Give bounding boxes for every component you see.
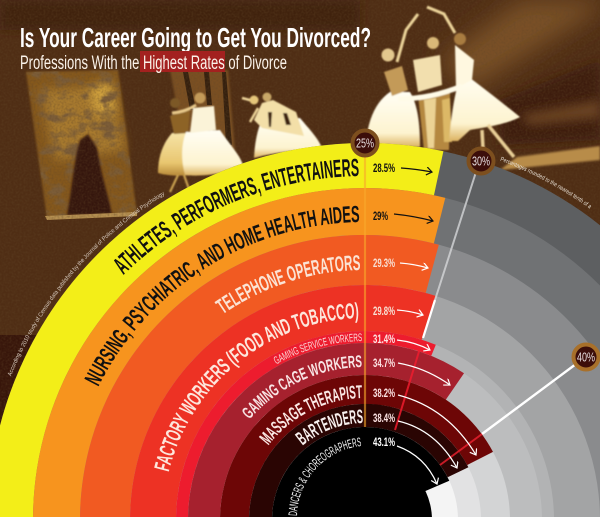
25% reference line [364,150,366,427]
ring: Telephone operators [80,235,600,517]
label: gaming cage: GAMING CAGE WORKERS [242,355,362,418]
subtitle: Professions With the Highest Rates of Divorce [20,53,287,74]
ring: Factory workers [130,285,600,517]
ring: Gaming cage workers [188,343,542,517]
label: bartenders: BARTENDERS [294,410,363,446]
center disc [298,453,432,517]
source footnote: According to 2010 study of Census data published by the Journal of Police and Criminal Psychology [8,192,164,376]
percentage values: 29.8% [373,304,395,318]
percentage values [373,161,395,449]
label: nursing: NURSING, PSYCHIATRIC, AND HOME HEALTH AIDES [84,206,360,386]
label: dancers: DANCERS & CHOREOGRAPHERS [288,438,362,516]
dancers: trio [242,92,322,158]
percentage values: 29.3% [373,256,395,270]
ring: Bartenders [249,404,481,517]
ring: Nursing, psychiatric, and home health aides [33,188,600,517]
marker 25% [352,130,378,156]
label: telephone: TELEPHONE OPERATORS [214,255,360,313]
marker 25%: 25% [356,136,374,150]
marker 30% [468,148,494,174]
dancers: pair [158,92,243,192]
percentage values: 31.4% [373,332,395,346]
label: factory: FACTORY WORKERS (FOOD AND TOBACCO) [154,302,358,472]
highlight behind subtitle [140,51,225,72]
40% reference line [440,364,576,465]
ring: Gaming service workers [176,331,554,517]
percentage values: 34.7% [373,356,395,370]
gray remainder rings and coloured bars [0,143,600,517]
floor light bar [500,146,600,170]
rounding footnote: Percentages rounded to the nearest tenth of a % [500,156,591,209]
percentage values: 43.1% [373,435,395,449]
ring: Massage therapist [220,375,510,517]
label: athletes: ATHLETES, PERFORMERS, ENTERTAINERS [114,158,359,275]
painted curtain panel with shadow [26,70,137,220]
ring: Athletes, performers, entertainers [0,143,600,517]
percentage values: 38.2% [373,386,395,400]
label: gaming service: GAMING SERVICE WORKERS [274,333,362,364]
marker 40% [574,344,598,370]
percentage values: 38.4% [373,411,395,425]
title: Is Your Career Going to Get You Divorced? [20,22,371,53]
percentage values: 28.5% [373,161,395,175]
marker 30%: 30% [472,154,490,168]
ring: Dancers and choreographers [272,427,458,517]
arrows [394,168,476,484]
30% reference line [395,172,476,430]
percentage values: 29% [373,209,388,223]
background curtain [170,70,235,150]
ring labels [84,158,363,516]
dancers: main group [367,7,520,157]
label: massage: MASSAGE THERAPIST [258,385,362,446]
